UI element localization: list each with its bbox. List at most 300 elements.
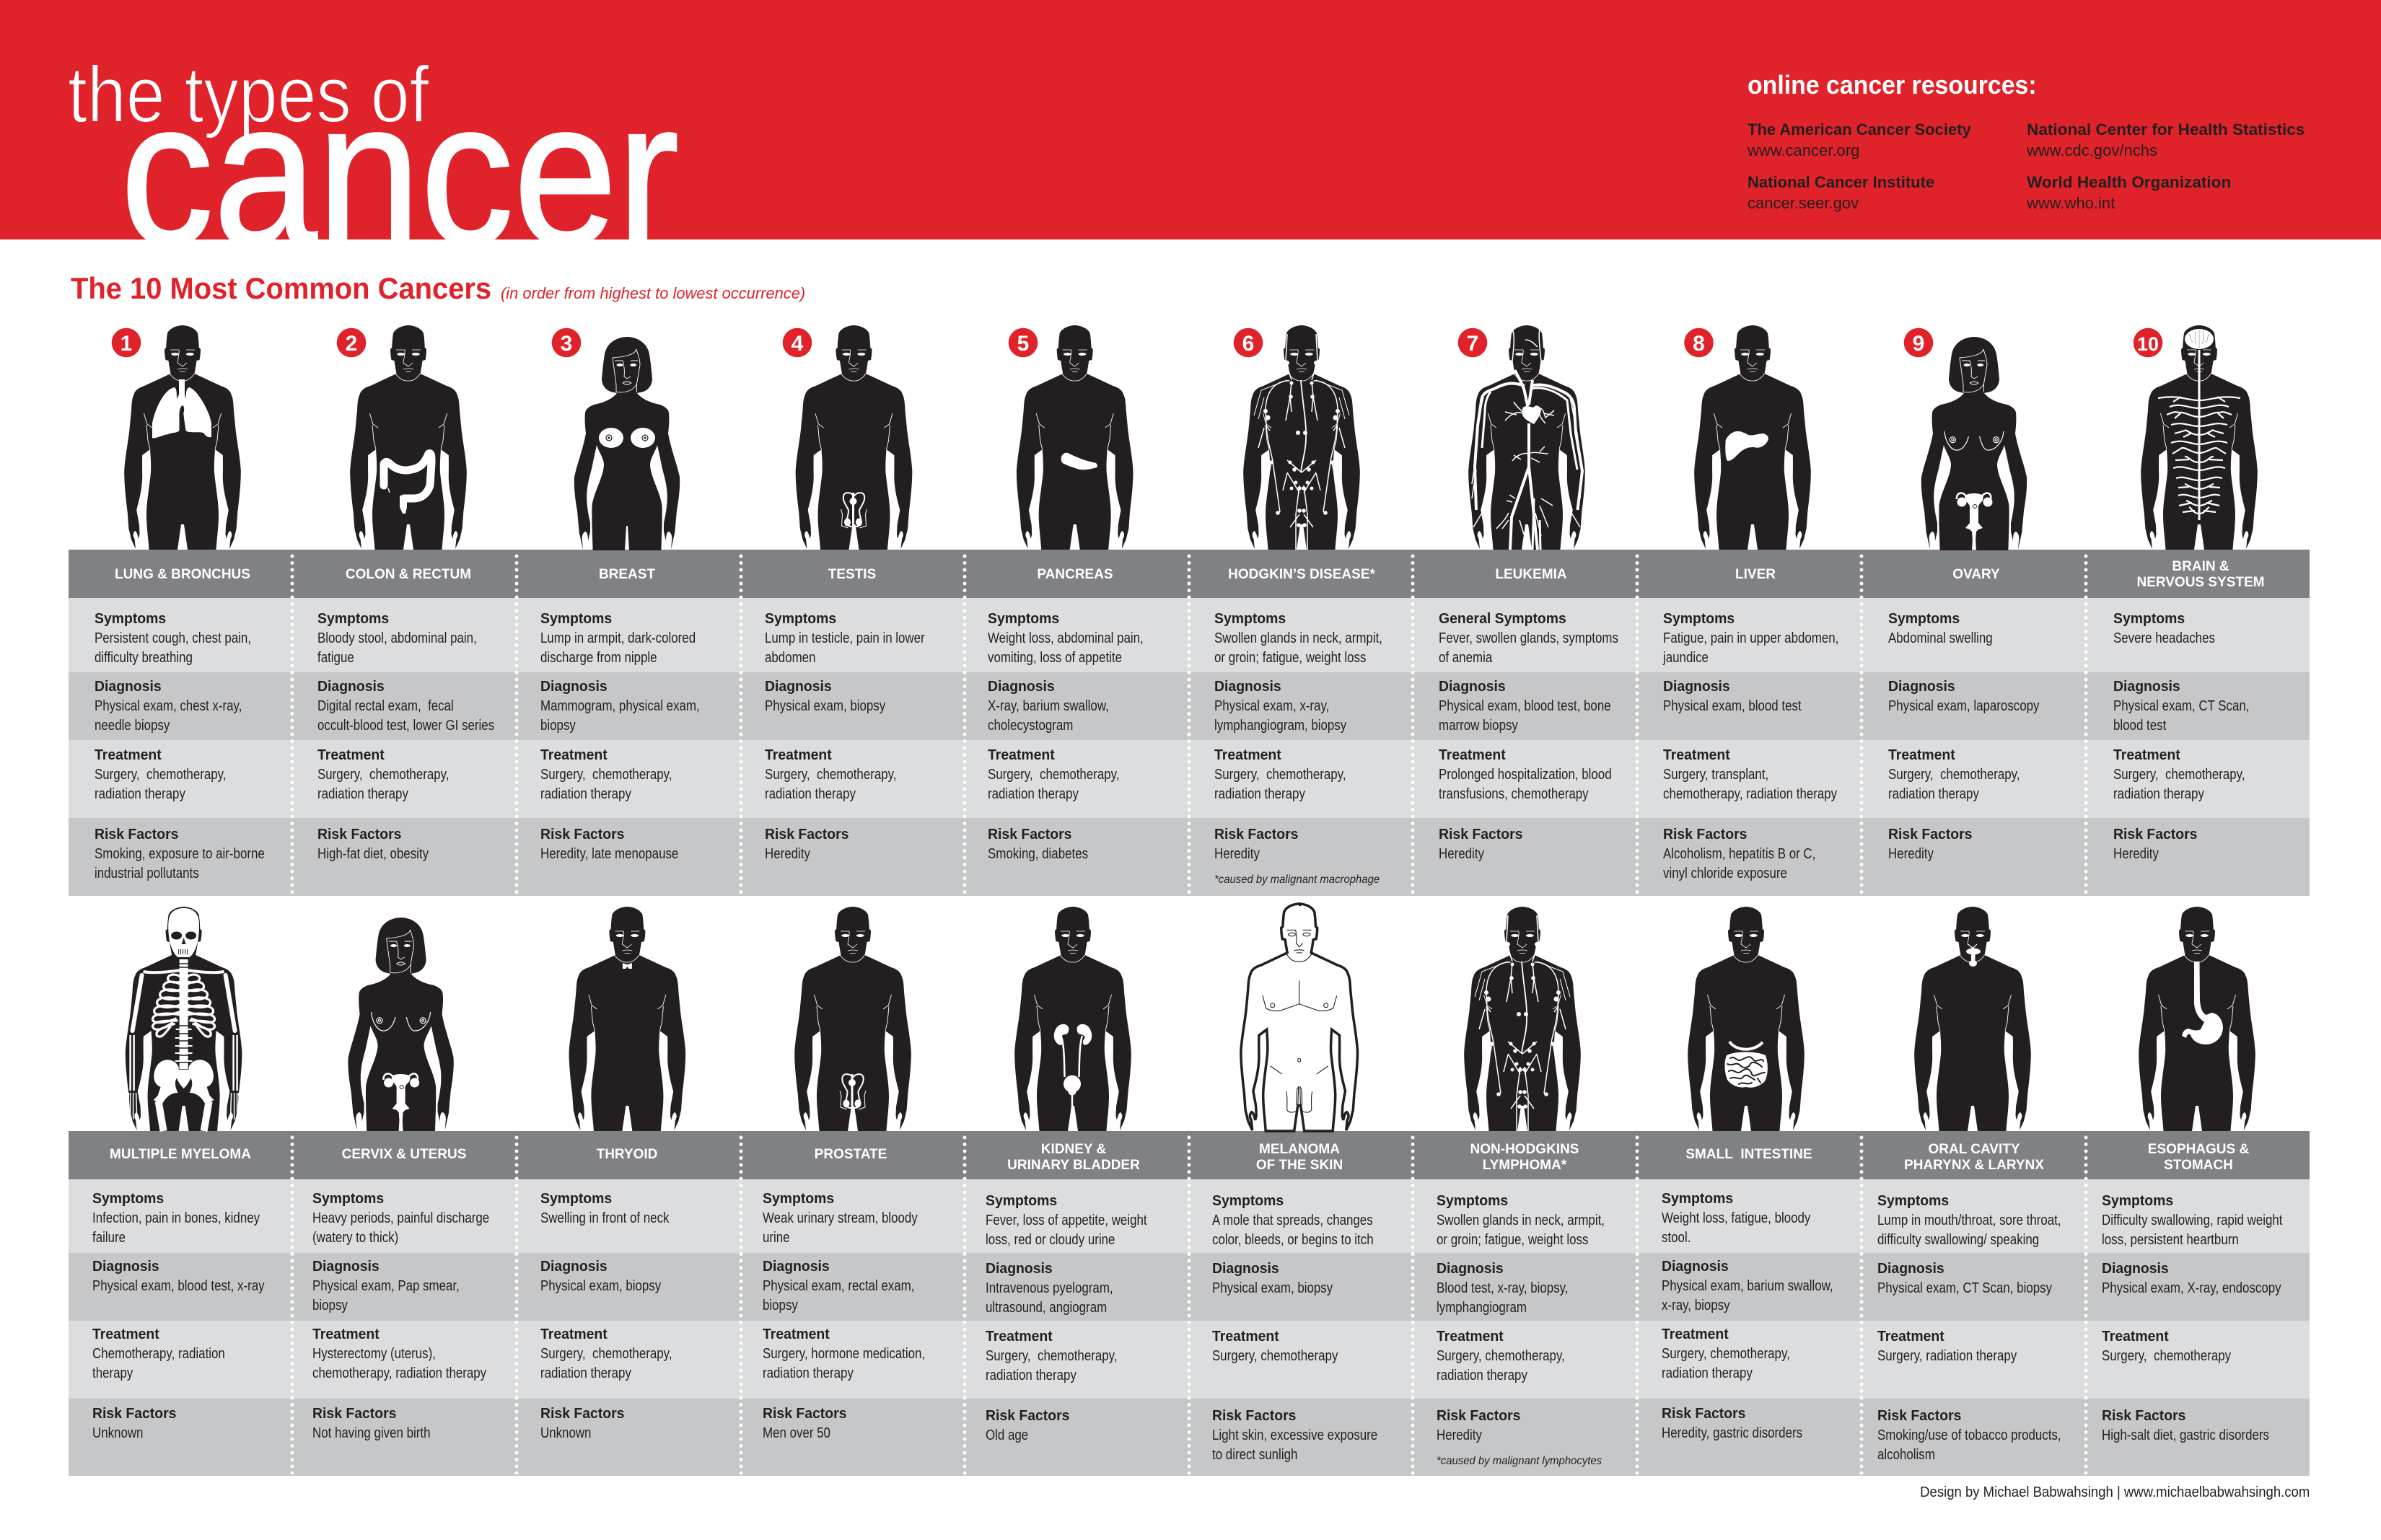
symptoms: Severe headaches (2113, 630, 2215, 646)
diagnosis: Diagnosis (988, 679, 1055, 695)
panel: thyroid (517, 902, 740, 1476)
symptoms: or groin; fatigue, weight loss (1214, 650, 1366, 666)
diagnosis: Physical exam, X-ray, endoscopy (2102, 1280, 2281, 1296)
diagnosis (317, 679, 494, 734)
risk factors: *caused by malignant macrophage (1214, 874, 1380, 886)
risk factors: Risk Factors (540, 1406, 624, 1422)
figure: brain and nerves: 10 (2137, 333, 2159, 355)
risk factors: High-salt diet, gastric disorders (2102, 1427, 2269, 1443)
risk factors: Risk Factors (2113, 827, 2197, 842)
diagnosis: Diagnosis (1888, 679, 1955, 695)
treatment: radiation therapy (2113, 786, 2204, 802)
diagnosis: Digital rectal exam, fecal (317, 698, 454, 714)
label (2087, 1141, 2310, 1173)
risk factors: Heredity (1437, 1427, 1482, 1443)
risk factors (1439, 825, 1641, 864)
symptoms: Symptoms (2102, 1193, 2173, 1209)
symptoms (2102, 1192, 2304, 1250)
label: LYMPHOMA* (1483, 1157, 1566, 1173)
treatment: radiation therapy (1662, 1365, 1753, 1381)
risk factors: to direct sunligh (1212, 1447, 1297, 1463)
symptoms: Difficulty swallowing, rapid weight (2102, 1213, 2282, 1228)
diagnosis (1663, 677, 1865, 716)
diagnosis: Diagnosis (1662, 1259, 1729, 1275)
diagnosis: Diagnosis (95, 679, 162, 695)
risk factors (95, 827, 265, 881)
risk factors: Risk Factors (763, 1406, 846, 1422)
symptoms (1439, 610, 1641, 668)
diagnosis: Diagnosis (765, 679, 832, 695)
symptoms (2113, 610, 2315, 648)
figure: blood vessels (1413, 317, 1636, 550)
label: LEUKEMIA (1495, 567, 1567, 582)
treatment: Treatment (1877, 1329, 1944, 1345)
label: ORAL CAVITY (1928, 1141, 2020, 1157)
figure: kidneys and bladder (965, 902, 1188, 1131)
treatment: Surgery, transplant, (1663, 767, 1768, 783)
risk factors: Heredity (1888, 846, 1934, 862)
panel: pancreas (988, 325, 1144, 862)
risk factors: Risk Factors (2102, 1408, 2185, 1424)
panel: cervix and uterus (292, 902, 516, 1476)
treatment (2113, 746, 2315, 804)
treatment: Treatment (317, 747, 385, 763)
figure: thyroid (517, 902, 740, 1131)
diagnosis: Intravenous pyelogram, (986, 1280, 1113, 1296)
symptoms (95, 611, 251, 666)
risk factors: Risk Factors (1888, 827, 1972, 842)
treatment: Chemotherapy, radiation (92, 1346, 225, 1362)
diagnosis: Diagnosis (540, 679, 608, 695)
online resources (1748, 70, 2305, 212)
diagnosis: lymphangiogram, biopsy (1214, 718, 1346, 734)
treatment: Surgery, chemotherapy, (1662, 1346, 1790, 1362)
treatment: Treatment (95, 747, 162, 763)
treatment: radiation therapy (763, 1365, 854, 1381)
symptoms: Symptoms (540, 1191, 612, 1207)
figure: colon: 2 (346, 332, 357, 356)
treatment: Treatment (1437, 1329, 1504, 1345)
diagnosis: marrow biopsy (1439, 718, 1518, 734)
treatment (92, 1325, 294, 1383)
diagnosis (1437, 1259, 1639, 1318)
symptoms: vomiting, loss of appetite (988, 650, 1122, 666)
diagnosis: lymphangiogram (1437, 1300, 1527, 1316)
risk factors: Smoking/use of tobacco products, (1877, 1427, 2061, 1443)
treatment: Surgery, chemotherapy, (317, 767, 450, 783)
symptoms: A mole that spreads, changes (1212, 1213, 1373, 1228)
treatment: Surgery, chemotherapy, (2113, 767, 2245, 783)
figure: blood vessels: 7 (1467, 332, 1478, 356)
resource: National Center for Health Statistics: www.cdc.gov/nchs (2027, 141, 2157, 159)
diagnosis: Diagnosis (1439, 679, 1506, 695)
symptoms: Symptoms (1437, 1193, 1508, 1209)
figure: pancreas: 5 (1017, 332, 1029, 356)
diagnosis (1439, 677, 1641, 736)
diagnosis: Diagnosis (2102, 1261, 2169, 1277)
resource: World Health Organization: www.who.int (2027, 194, 2115, 212)
label: MULTIPLE MYELOMA (110, 1147, 251, 1162)
panel: kidney and urinary bladder (965, 902, 1188, 1476)
risk factors: vinyl chloride exposure (1663, 866, 1787, 881)
risk factors (312, 1404, 514, 1443)
symptoms (1437, 1192, 1639, 1250)
treatment: Surgery, chemotherapy, (1437, 1348, 1565, 1364)
symptoms: discharge from nipple (540, 650, 657, 666)
diagnosis: Physical exam, CT Scan, biopsy (1877, 1280, 2052, 1296)
resource: National Center for Health Statistics (2027, 120, 2305, 159)
symptoms: Symptoms (1214, 611, 1286, 627)
risk factors: Risk Factors (1437, 1408, 1520, 1424)
symptoms: Swelling in front of neck (540, 1210, 669, 1226)
figure: pancreas (1009, 325, 1133, 550)
symptoms: Symptoms (1662, 1191, 1733, 1207)
risk factors: High-fat diet, obesity (317, 846, 429, 862)
diagnosis: ultrasound, angiogram (986, 1300, 1107, 1316)
symptoms: General Symptoms (1439, 611, 1566, 627)
resource: National Cancer Institute (1748, 173, 1934, 212)
symptoms: fatigue (317, 650, 354, 666)
label: MELANOMA (1259, 1141, 1340, 1157)
diagnosis: Diagnosis (92, 1259, 159, 1275)
treatment: Treatment (1439, 747, 1506, 763)
risk factors: Unknown (540, 1425, 591, 1441)
treatment (765, 747, 897, 802)
diagnosis (988, 679, 1109, 734)
risk factors: Risk Factors (1212, 1408, 1296, 1424)
figure: lymph system (1234, 325, 1360, 550)
risk factors (317, 827, 429, 862)
symptoms: Symptoms (986, 1193, 1057, 1209)
risk factors (765, 827, 849, 862)
label: COLON & RECTUM (346, 567, 471, 582)
figure: ovary (1862, 317, 2085, 550)
label: NON-HODGKINS (1470, 1141, 1579, 1157)
treatment: radiation therapy (1214, 786, 1305, 802)
symptoms: Heavy periods, painful discharge (312, 1210, 489, 1226)
diagnosis (986, 1259, 1188, 1318)
panel: lung and bronchus (95, 325, 265, 881)
symptoms: Symptoms (988, 611, 1059, 627)
label: ESOPHAGUS & (2148, 1141, 2249, 1157)
diagnosis: biopsy (312, 1298, 348, 1314)
symptoms: loss, persistent heartburn (2102, 1232, 2239, 1248)
treatment: Treatment (540, 1326, 608, 1342)
diagnosis: biopsy (763, 1298, 798, 1314)
treatment: chemotherapy, radiation therapy (1663, 786, 1837, 802)
risk factors: Old age (986, 1427, 1028, 1443)
symptoms: Symptoms (92, 1191, 164, 1207)
diagnosis: Physical exam, biopsy (540, 1278, 661, 1294)
symptoms: Weight loss, fatigue, bloody (1662, 1210, 1810, 1226)
label (2089, 559, 2312, 591)
diagnosis: occult-blood test, lower GI series (317, 718, 494, 734)
symptoms: Symptoms (763, 1191, 834, 1207)
treatment (1437, 1327, 1639, 1386)
table row two background (69, 1131, 2310, 1476)
diagnosis (540, 1257, 742, 1296)
risk factors: Risk Factors (92, 1406, 176, 1422)
risk factors (540, 1404, 742, 1443)
treatment: Treatment (1662, 1326, 1729, 1342)
panel: leukemia (1413, 317, 1636, 895)
treatment: radiation therapy (1888, 786, 1979, 802)
figure: lungs: 1 (120, 332, 132, 356)
section subheading: (in order from highest to lowest occurrence) (501, 284, 805, 302)
risk factors (1214, 825, 1416, 887)
symptoms: loss, red or cloudy urine (986, 1232, 1115, 1248)
figure: uterus (292, 902, 516, 1131)
risk factors: Risk Factors (317, 827, 401, 842)
risk factors: Not having given birth (312, 1425, 430, 1441)
risk factors (1212, 1407, 1414, 1465)
panel: multiple myeloma (69, 902, 292, 1476)
treatment: Hysterectomy (uterus), (312, 1346, 436, 1362)
diagnosis: Physical exam, Pap smear, (312, 1278, 460, 1294)
resource: American Cancer Society: www.cancer.org (1748, 141, 1859, 159)
diagnosis: Diagnosis (1663, 679, 1730, 695)
treatment: Treatment (986, 1329, 1053, 1345)
symptoms: Symptoms (312, 1191, 384, 1207)
label: CERVIX & UTERUS (342, 1147, 466, 1162)
resource: National Cancer Institute: National Cancer Institute (1748, 173, 1934, 191)
panel: testis (765, 325, 925, 862)
treatment (1877, 1327, 2079, 1366)
label: BREAST (599, 567, 655, 582)
label: OF THE SKIN (1256, 1157, 1343, 1173)
treatment: transfusions, chemotherapy (1439, 786, 1589, 802)
panel: melanoma of the skin (1189, 902, 1413, 1476)
treatment (540, 747, 672, 802)
diagnosis: cholecystogram (988, 718, 1073, 734)
diagnosis: Physical exam, rectal exam, (763, 1278, 914, 1294)
panel: ovary (1862, 317, 2085, 895)
treatment: radiation therapy (765, 786, 856, 802)
risk factors: Risk Factors (540, 827, 624, 842)
symptoms: jaundice (1663, 650, 1709, 666)
risk factors (92, 1404, 294, 1443)
symptoms: abdomen (765, 650, 815, 666)
symptoms: Swollen glands in neck, armpit, (1214, 630, 1382, 646)
risk factors: Risk Factors (1662, 1406, 1745, 1422)
treatment: Surgery, chemotherapy, (1214, 767, 1346, 783)
symptoms: Symptoms (1877, 1193, 1949, 1209)
treatment: Surgery, chemotherapy (1212, 1348, 1338, 1364)
diagnosis: Diagnosis (986, 1261, 1053, 1277)
treatment: Treatment (1663, 747, 1730, 763)
symptoms (540, 1189, 742, 1228)
symptoms (317, 611, 477, 666)
panel: liver (1637, 317, 1861, 895)
resource: National Cancer Institute: cancer.seer.gov (1748, 194, 1859, 212)
panel: esophagus and stomach (2086, 902, 2310, 1476)
label: PHARYNX & LARYNX (1904, 1157, 2044, 1173)
risk factors: Alcoholism, hepatitis B or C, (1663, 846, 1815, 862)
risk factors: Risk Factors (95, 827, 178, 842)
figure: esophagus and stomach (2086, 902, 2310, 1131)
label: SMALL INTESTINE (1685, 1147, 1812, 1162)
panel: small intestine (1637, 902, 1861, 1476)
treatment (763, 1325, 965, 1383)
figure: lungs (111, 325, 241, 550)
treatment: Treatment (1214, 747, 1281, 763)
symptoms: Symptoms (95, 611, 166, 627)
label: PROSTATE (815, 1147, 887, 1162)
risk factors: Heredity, gastric disorders (1662, 1425, 1802, 1441)
treatment: Surgery, chemotherapy (2102, 1348, 2231, 1364)
symptoms: urine (763, 1230, 790, 1246)
diagnosis: x-ray, biopsy (1662, 1298, 1730, 1314)
risk factors: Smoking, exposure to air-borne (95, 846, 265, 862)
diagnosis (95, 679, 242, 734)
risk factors: alcoholism (1877, 1447, 1935, 1463)
symptoms: Fever, swollen glands, symptoms (1439, 630, 1618, 646)
panel: oral cavity pharynx and larynx (1862, 902, 2085, 1476)
resources heading: online cancer resources: (1748, 70, 2037, 100)
diagnosis: Diagnosis (1437, 1261, 1504, 1277)
symptoms: Lump in testicle, pain in lower (765, 630, 925, 646)
treatment: Surgery, chemotherapy, (988, 767, 1120, 783)
risk factors: *caused by malignant lymphocytes (1437, 1455, 1602, 1467)
symptoms: failure (92, 1230, 126, 1246)
symptoms: Symptoms (1663, 611, 1735, 627)
diagnosis: Physical exam, biopsy (765, 698, 885, 714)
section heading: The 10 Most Common Cancers (71, 271, 491, 305)
risk factors (540, 827, 678, 862)
symptoms: Bloody stool, abdominal pain, (317, 630, 477, 646)
treatment: radiation therapy (1437, 1368, 1527, 1383)
risk factors: Heredity (2113, 846, 2159, 862)
figure: colon (336, 325, 467, 550)
risk factors: industrial pollutants (95, 866, 199, 881)
diagnosis (1214, 677, 1416, 736)
treatment: Surgery, chemotherapy, (1888, 767, 2020, 783)
resource: American Cancer Society (1748, 120, 1971, 159)
treatment (2102, 1327, 2304, 1366)
figure: ovary: 9 (1913, 332, 1924, 356)
diagnosis: biopsy (540, 718, 576, 734)
treatment: Treatment (2102, 1329, 2169, 1345)
figure: skeleton (69, 902, 292, 1131)
figure: lymph system: 6 (1242, 332, 1254, 356)
treatment: Surgery, chemotherapy, (540, 1346, 672, 1362)
symptoms (312, 1189, 514, 1248)
treatment: Treatment (988, 747, 1055, 763)
resource: World Health Organization: World Health Organization (2027, 173, 2231, 191)
figure: oral cavity (1862, 902, 2085, 1131)
diagnosis (765, 679, 886, 714)
treatment (988, 747, 1120, 802)
symptoms: Abdominal swelling (1888, 630, 1993, 646)
panel: hodgkin's disease (1214, 325, 1382, 886)
symptoms: Symptoms (317, 611, 389, 627)
treatment: Treatment (540, 747, 608, 763)
risk factors: Risk Factors (1214, 827, 1298, 842)
symptoms: Lump in mouth/throat, sore throat, (1877, 1213, 2061, 1228)
panel: colon and rectum (317, 325, 494, 862)
symptoms (1212, 1192, 1414, 1250)
symptoms: Symptoms (765, 611, 836, 627)
diagnosis: Blood test, x-ray, biopsy, (1437, 1280, 1569, 1296)
treatment: Surgery, chemotherapy, (95, 767, 227, 783)
treatment: chemotherapy, radiation therapy (312, 1365, 486, 1381)
diagnosis: Physical exam, barium swallow, (1662, 1278, 1833, 1294)
treatment (1663, 746, 1865, 804)
diagnosis: Diagnosis (540, 1259, 608, 1275)
treatment: therapy (92, 1365, 133, 1381)
risk factors: Risk Factors (1877, 1408, 1961, 1424)
treatment: radiation therapy (986, 1368, 1077, 1383)
treatment: radiation therapy (317, 786, 408, 802)
figure: breast (551, 327, 680, 550)
risk factors: Heredity (1214, 846, 1260, 862)
label (1413, 1141, 1636, 1173)
diagnosis (312, 1257, 514, 1316)
diagnosis: Physical exam, blood test, bone (1439, 698, 1611, 714)
treatment: Prolonged hospitalization, blood (1439, 767, 1612, 783)
treatment: Treatment (1888, 747, 1955, 763)
risk factors (1888, 825, 2090, 864)
symptoms: Symptoms (540, 611, 612, 627)
label: HODGKIN’S DISEASE* (1228, 567, 1375, 582)
symptoms (988, 611, 1144, 666)
symptoms: Symptoms (2113, 611, 2185, 627)
symptoms (1214, 611, 1382, 666)
diagnosis: Diagnosis (1212, 1261, 1279, 1277)
risk factors: Risk Factors (1439, 827, 1522, 842)
diagnosis: X-ray, barium swallow, (988, 698, 1109, 714)
label (962, 1141, 1185, 1173)
symptoms: stool. (1662, 1230, 1691, 1246)
resource: National Center for Health Statistics: National Center for Health Statistics (2027, 120, 2305, 138)
risk factors (2102, 1407, 2304, 1446)
label: OVARY (1952, 567, 2000, 582)
risk factors: Light skin, excessive exposure (1212, 1427, 1377, 1443)
resource: World Health Organization (2027, 173, 2231, 212)
risk factors: Men over 50 (763, 1425, 830, 1441)
label (1862, 1141, 2086, 1173)
symptoms (1888, 610, 2090, 648)
treatment: Surgery, chemotherapy, (540, 767, 672, 783)
diagnosis (92, 1257, 294, 1296)
label: BRAIN & (2172, 559, 2229, 574)
symptoms: Persistent cough, chest pain, (95, 630, 251, 646)
figure: breast: 3 (561, 332, 572, 356)
treatment (540, 1325, 742, 1383)
treatment: Surgery, chemotherapy, (765, 767, 897, 783)
risk factors (2113, 825, 2315, 864)
symptoms (1663, 610, 1865, 668)
symptoms: difficulty swallowing/ speaking (1877, 1232, 2039, 1248)
diagnosis: Physical exam, x-ray, (1214, 698, 1329, 714)
symptoms: Swollen glands in neck, armpit, (1437, 1213, 1605, 1228)
treatment: radiation therapy (540, 786, 631, 802)
treatment (1214, 746, 1416, 804)
diagnosis (763, 1257, 965, 1316)
risk factors: Risk Factors (1663, 827, 1747, 842)
treatment: Treatment (765, 747, 832, 763)
figure: testis (782, 325, 912, 550)
label (1188, 1141, 1411, 1173)
label: KIDNEY & (1041, 1141, 1106, 1157)
risk factors (763, 1404, 965, 1443)
diagnosis (1877, 1259, 2079, 1298)
risk factors: Heredity (1439, 846, 1484, 862)
diagnosis: Diagnosis (1214, 679, 1281, 695)
risk factors: Risk Factors (988, 827, 1071, 842)
figure: prostate (741, 902, 965, 1131)
diagnosis (2102, 1259, 2304, 1298)
